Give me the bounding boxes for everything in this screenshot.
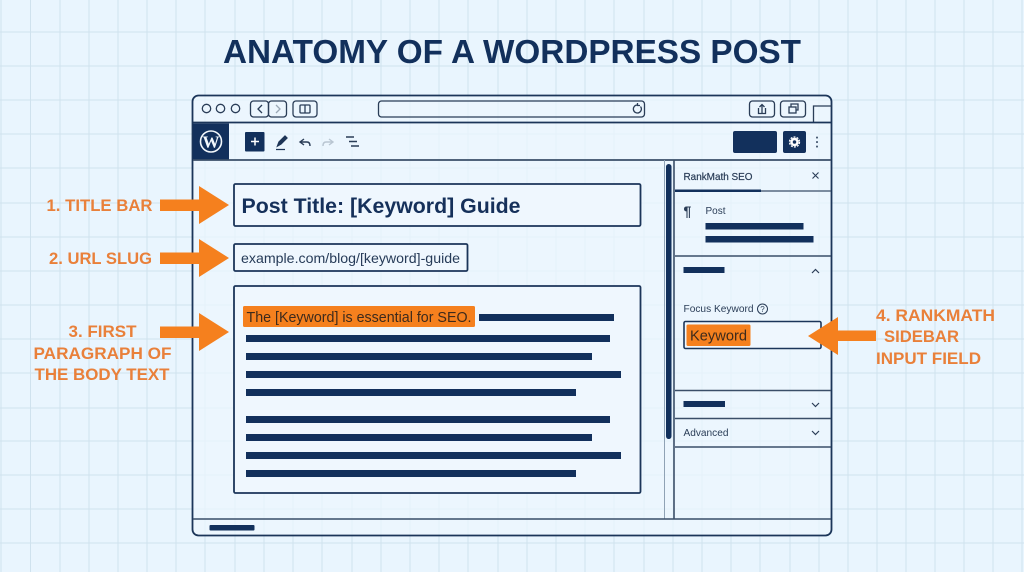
- advanced section: Advanced: [684, 428, 728, 439]
- label 2: 2. URL SLUG: [49, 249, 152, 268]
- label 4: [876, 306, 995, 368]
- editor toolbar icons: [245, 132, 359, 152]
- toolbar publish button and settings: [733, 131, 817, 153]
- url slug field: [234, 244, 468, 271]
- panel: browser window: [192, 96, 832, 536]
- panel: rankmath sidebar: [675, 171, 831, 447]
- focus keyword label: ?: [760, 305, 765, 314]
- body text panel: [234, 286, 640, 493]
- post summary: [684, 203, 814, 242]
- focus keyword input: Keyword: [690, 328, 747, 344]
- wordpress logo tile: [193, 124, 229, 160]
- sidebar header: [675, 171, 831, 192]
- sidebar header: RankMath SEO: [684, 171, 752, 183]
- body text lines: [246, 314, 621, 477]
- arrow 3: [160, 313, 229, 351]
- post title field: Post Title: [Keyword] Guide: [242, 194, 521, 218]
- title: ANATOMY OF A WORDPRESS POST: [223, 33, 801, 70]
- highlighted first sentence: The [Keyword] is essential for SEO.: [246, 310, 472, 326]
- label 3: 3. FIRST: [68, 322, 137, 341]
- label 4: SIDEBAR: [884, 327, 959, 346]
- status bar: [193, 519, 831, 530]
- arrow 2: [160, 239, 229, 277]
- collapsed section: [684, 401, 819, 407]
- post summary: ¶: [684, 203, 692, 219]
- label 1: 1. TITLE BAR: [46, 196, 152, 215]
- wordpress logo tile: W: [202, 132, 220, 152]
- focus keyword input: [684, 322, 821, 348]
- arrow 1: [160, 186, 229, 224]
- post title field: [234, 184, 640, 226]
- scrollbar: [664, 160, 672, 519]
- section header collapsed bar: [684, 267, 819, 273]
- label 3: PARAGRAPH OF: [34, 344, 172, 363]
- post summary: Post: [706, 206, 726, 217]
- label 3: [34, 322, 172, 384]
- focus keyword label: Focus Keyword: [684, 304, 754, 315]
- label 3: THE BODY TEXT: [34, 365, 170, 384]
- advanced section: [684, 428, 819, 439]
- browser chrome bar: [202, 101, 832, 122]
- label 4: 4. RANKMATH: [876, 306, 995, 325]
- label 4: INPUT FIELD: [876, 349, 981, 368]
- arrow 4: [808, 317, 876, 355]
- url slug field: example.com/blog/[keyword]-guide: [241, 250, 460, 266]
